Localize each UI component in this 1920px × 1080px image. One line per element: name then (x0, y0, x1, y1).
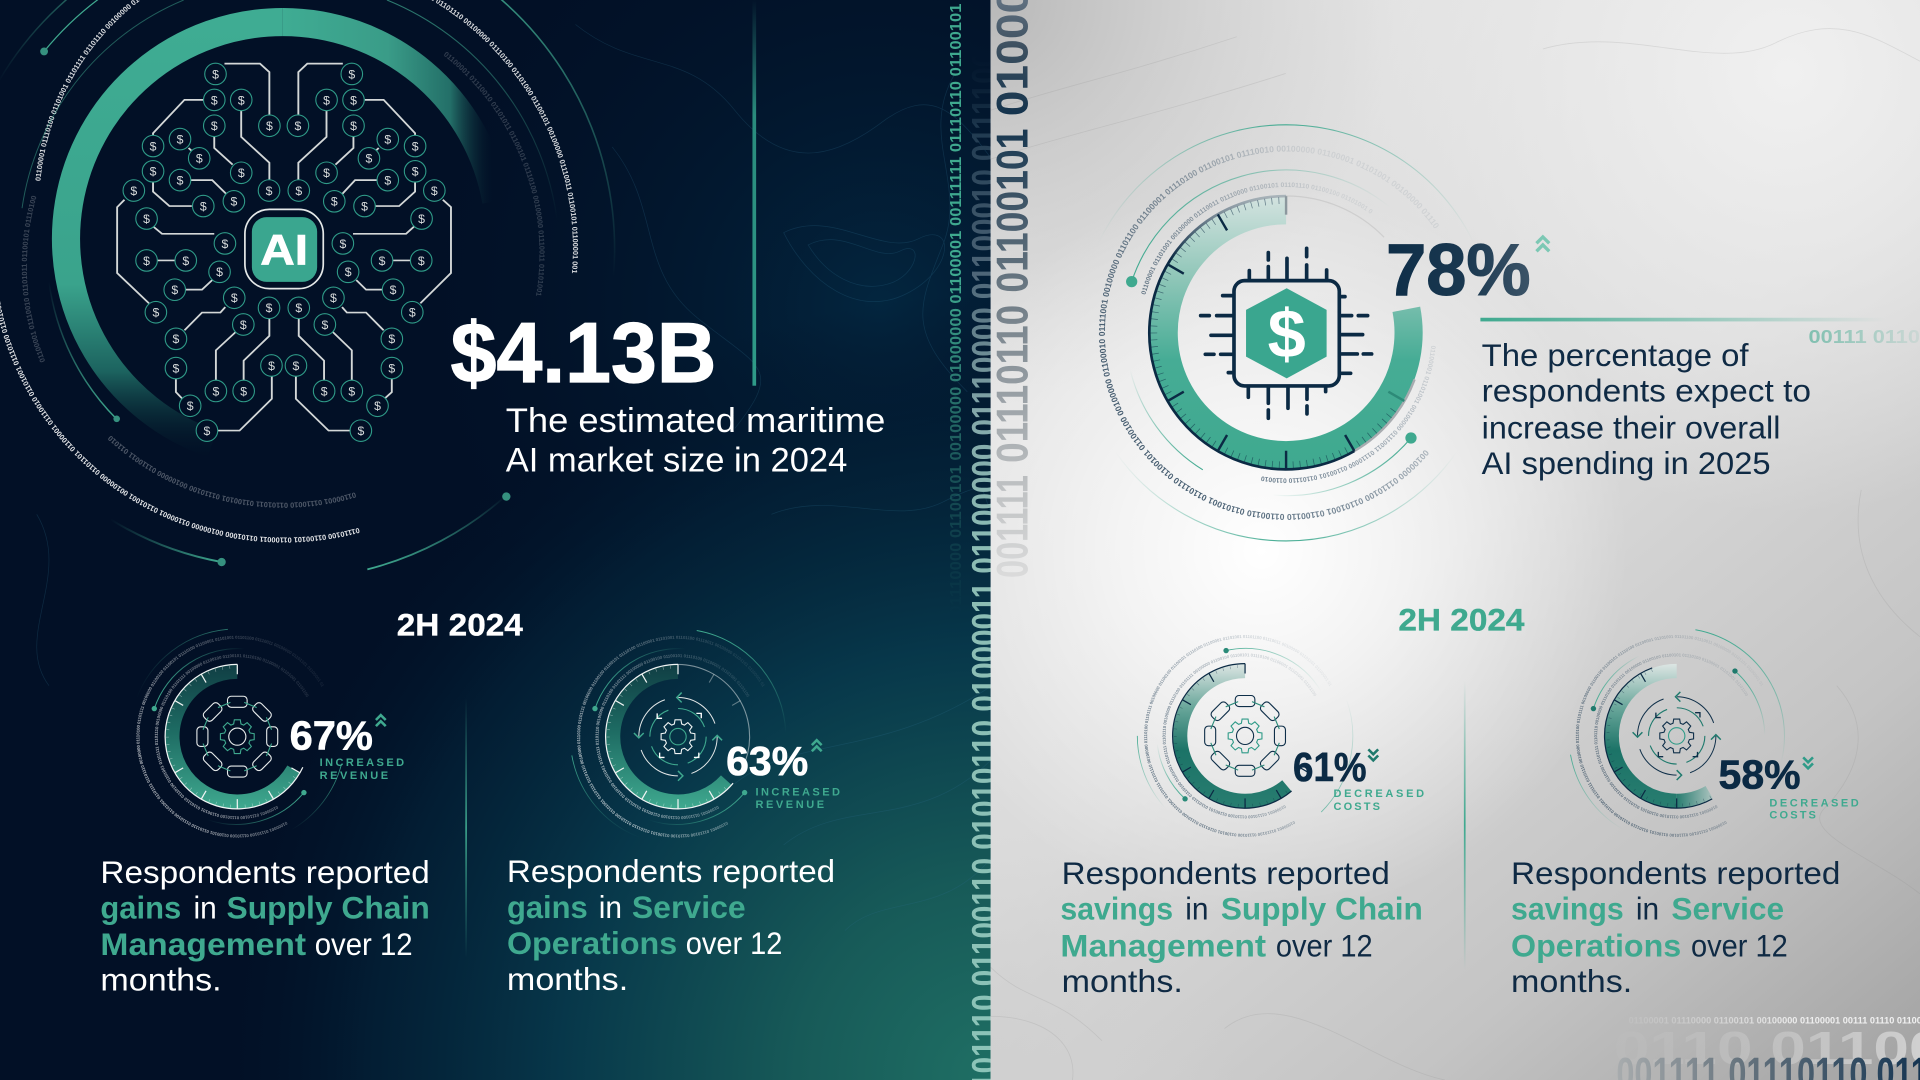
label: 63%: REVENUE (756, 799, 824, 811)
gauge: 78%: 01100001 01101001 00100000 01110011 01110000 01100101 01101110 01100100 01101001 01101110 01100111 01100001 01101001 (1141, 182, 1372, 294)
icon: brain circuit: $ (295, 119, 302, 133)
description: AI spending: AI spending in 2025 (1482, 445, 1771, 481)
text block: supply chain gains: months. (100, 962, 222, 998)
text block: service operations savings: Operations (1511, 927, 1681, 963)
faint binary corner text: 00111 0110 (1809, 326, 1920, 347)
text block: service operations gains: in (599, 889, 622, 925)
label: 63%: 63% (726, 738, 808, 784)
text block: service operations savings: savings (1511, 891, 1624, 927)
icon: brain circuit: $ (388, 332, 395, 346)
panel: maritime AI market size (0, 0, 885, 570)
label: 61% (1293, 744, 1424, 813)
gauge: 63% increased revenue: 01000001 01110100 01110100 01100101 01101110 01110100 01101001 01101111 01101110 00100000 01110100 01101111 00100000 01100100 01100101 01110100 01100001 01101001 01101100 (595, 654, 750, 820)
stat: $4.13B: $4.13B (451, 305, 716, 401)
icon: brain circuit: $ (171, 283, 178, 297)
heading: right 2H 2024: 2H 2024 (1398, 602, 1525, 638)
icon: brain circuit: $ (152, 306, 159, 320)
text block: service operations savings: in (1636, 891, 1659, 927)
gauge: 78%: 01100001 01101001 00100000 01110011 01110000 01100101 01101110 01100100 01101001 01101110 01100111 (1261, 346, 1436, 484)
icon: brain circuit: $ (240, 318, 247, 332)
icon: brain circuit: $ (231, 291, 238, 305)
icon: brain circuit: $ (143, 212, 150, 226)
icon: brain circuit: $ (350, 119, 357, 133)
icon: brain circuit: $ (173, 361, 180, 375)
icon: brain circuit: $ (345, 265, 352, 279)
description: market size: The estimated maritime (506, 402, 885, 440)
description: AI spending: increase their overall (1482, 409, 1780, 445)
icon: dollar chip (1201, 248, 1372, 418)
left panel background (0, 0, 992, 1080)
icon: brain circuit: $ (196, 152, 203, 166)
text block: supply chain gains: over 12 (315, 926, 413, 962)
text block: supply chain savings: Management (1060, 927, 1267, 963)
icon: brain circuit: $ (143, 254, 150, 268)
label: 67%: INCREASED (320, 757, 404, 769)
icon: dollar chip: $ (1268, 296, 1306, 373)
label: 61%: COSTS (1333, 801, 1380, 813)
icon: brain circuit: $ (200, 199, 207, 213)
icon: brain circuit: $ (177, 133, 184, 147)
divider line (1480, 318, 1886, 321)
icon: brain circuit: $ (212, 67, 219, 81)
gauge: 61% decreased costs: 01000001 01110100 01110100 01100101 01101110 01110100 01101001 01101111 01101110 00100000 01110100 01101111 00100000 01100100 01100101 01110100 01100001 01101001 01101100 01110011 00100000 01101101 01100001 01110010 (1144, 635, 1332, 837)
icon: brain circuit: $ (187, 399, 194, 413)
text block: supply chain savings: Respondents reported (1062, 855, 1390, 891)
icon: brain circuit: $ (211, 93, 218, 107)
heading: left 2H 2024: 2H 2024 (397, 607, 523, 643)
icon: brain circuit: $ (238, 166, 245, 180)
icon: brain circuit: $ (222, 237, 229, 251)
gauge: 67% increased revenue: 01000001 01110100 01110100 01100101 01101110 01110100 01101001 01101111 01101110 00100000 01110100 01101111 00100000 01100100 01100101 01110100 01100001 01101001 01101100 (154, 654, 308, 820)
icon: brain circuit: AI (260, 226, 308, 274)
icon: brain circuit: $ (216, 265, 223, 279)
icon: brain circuit: $ (379, 254, 386, 268)
text block: supply chain savings: Supply Chain (1221, 891, 1423, 927)
text block: service operations savings: Respondents reported (1511, 855, 1840, 891)
icon: brain circuit: $ (339, 237, 346, 251)
decorative binary column: right of divider (988, 0, 1037, 578)
stat: 78%: 78% (1386, 228, 1531, 311)
text block: service operations gains: over 12 (686, 925, 782, 961)
icon: brain circuit: $ (412, 165, 419, 179)
text block: service operations gains: Operations (507, 925, 677, 961)
icon: up chevrons (1536, 237, 1549, 251)
icon: brain circuit: $ (348, 67, 355, 81)
icon: brain circuit: $ (266, 119, 273, 133)
text block: service operations savings: months. (1511, 963, 1632, 999)
decorative binary column: right of divider: 001111 (988, 475, 1037, 578)
icon: brain circuit: $ (150, 139, 157, 153)
label: 58%: COSTS (1769, 810, 1816, 822)
icon: brain circuit: $ (323, 166, 330, 180)
text block: supply chain savings: months. (1062, 963, 1183, 999)
icon: brain circuit: $ (173, 332, 180, 346)
icon: brain circuit: $ (212, 384, 219, 398)
decorative binary column: right of divider: 01110110 (988, 305, 1037, 463)
icon: brain circuit: $ (350, 93, 357, 107)
icon: brain circuit: $ (240, 384, 247, 398)
gauge: 63% increased revenue: 01000001 01110100 01110100 01100101 01101110 01110100 01101001 01101111 01101110 00100000 01110100 01101111 00100000 01100100 01100101 01110100 01100001 01101001 01101100 01110011 00100000 01101101 01100001 01110010 (577, 636, 764, 838)
icon: brain circuit: $ (238, 93, 245, 107)
label: 58%: 58% (1719, 752, 1801, 798)
divider: left (465, 698, 467, 958)
icon: brain circuit: $ (323, 93, 330, 107)
text block: supply chain gains (100, 854, 430, 998)
circular binary rings and accent arcs (0, 0, 616, 570)
text block: service operations savings: Service (1671, 891, 1784, 927)
label: 63% (726, 738, 840, 811)
label: 63%: INCREASED (756, 786, 840, 798)
label: 58% (1719, 752, 1859, 822)
circular binary rings and accent arcs: 01100001 01110010 01101011 01100101 01110100 00100000 01110011 01101001 01111010 01100101 00100000 01101001 01101110 00100000 01101101 01100001 (108, 436, 356, 508)
right panel background (991, 0, 1920, 1080)
icon: brain circuit: $ (330, 291, 337, 305)
icon: brain circuit: $ (177, 174, 184, 188)
icon: brain circuit: $ (130, 184, 137, 198)
icon: brain circuit: $ (295, 184, 302, 198)
text block: supply chain gains: Management (100, 926, 307, 962)
label: 58%: DECREASED (1769, 797, 1859, 809)
icon: brain circuit: $ (409, 306, 416, 320)
text block: service operations savings (1511, 855, 1840, 999)
icon: brain circuit: $ (418, 212, 425, 226)
text block: supply chain savings (1060, 855, 1423, 999)
panel: AI spending 78% (1098, 124, 1920, 542)
gauge: 58% decreased costs: 01000001 01110100 01110100 01100101 01101110 01110100 01101001 01101111 01101110 00100000 01110100 01101111 00100000 01100100 01100101 01110100 01100001 01101001 01101100 (1594, 653, 1748, 818)
text block: supply chain savings: over 12 (1276, 927, 1373, 963)
decorative binary column: small teal: 01110000 01100101 00100000 01000000 01100001 00111111 01110110 01100101 01 (948, 0, 965, 615)
icon: brain circuit: $ (388, 361, 395, 375)
label: 67% (290, 712, 404, 782)
text block: service operations savings: over 12 (1691, 927, 1788, 963)
label: 67%: 67% (290, 712, 373, 758)
text block: supply chain gains: Respondents reported (100, 854, 430, 890)
text block: service operations gains: Service (632, 889, 746, 925)
text block: supply chain gains: Supply Chain (227, 889, 430, 925)
icon: brain circuit: $ (348, 384, 355, 398)
icon: brain circuit: $ (357, 424, 364, 438)
icon: brain circuit: $ (230, 195, 237, 209)
divider: right (1464, 681, 1466, 970)
description: AI spending: respondents expect to (1482, 373, 1811, 409)
label: 61%: 61% (1293, 744, 1367, 790)
decorative binary corner: 0110 01100 (1614, 1022, 1920, 1074)
label: 67%: REVENUE (320, 770, 388, 782)
decorative binary column: right of divider: 01100101 (988, 129, 1037, 293)
gauge: 67% increased revenue: 01000001 01110100 01110100 01100101 01101110 01110100 01101001 01101111 01101110 00100000 01110100 01101111 00100000 01100100 01100101 01110100 01100001 01101001 01101100 01110011 00100000 01101101 01100001 01110010 (136, 636, 324, 838)
description: AI spending: The percentage of (1482, 337, 1749, 373)
text block: supply chain gains: gains (100, 889, 181, 925)
gauge: 78%: 00100000 01110100 01101001 01100110 01100110 01101001 01101110 01100101 01100100 00100000 01100010 01111001 00100000 01101100 01100001 01110100 01100101 01110010 00100000 01100001 01101001 00100000 01110011 01110000 01100101 01101110 01100100 01101001 01101110 01100111 00100000 01101001 01101110 00100000 01110100 01101000 01100101 00100000 01101100 (1098, 146, 1438, 520)
icon: brain circuit: $ (266, 301, 273, 315)
icon: brain circuit: $ (374, 399, 381, 413)
gauge: 58% decreased costs: 01000001 01110100 01110100 01100101 01101110 01110100 01101001 01101111 01101110 00100000 01110100 01101111 00100000 01100100 01100101 01110100 01100001 01101001 01101100 01110011 00100000 01101101 01100001 01110010 (1576, 635, 1763, 837)
description: AI spending (1482, 337, 1811, 481)
text block: supply chain savings: in (1185, 891, 1209, 927)
gauge: 61% decreased costs: 01000001 01110100 01110100 01100101 01101110 01110100 01101001 01101111 01101110 00100000 01110100 01101111 00100000 01100100 01100101 01110100 01100001 01101001 01101100 (1162, 653, 1316, 818)
icon: brain circuit: $ (268, 359, 275, 373)
decorative binary corner (1614, 1016, 1920, 1080)
description: market size: AI market size in 2024 (506, 441, 847, 479)
text block: service operations gains (507, 853, 835, 997)
icon: brain circuit: $ (331, 195, 338, 209)
big teal progress ring (66, 22, 496, 444)
icon: brain circuit: $ (431, 184, 438, 198)
icon: brain circuit: $ (321, 384, 328, 398)
icon: brain circuit: $ (418, 254, 425, 268)
icon: brain circuit: $ (390, 283, 397, 297)
icon: brain circuit: $ (366, 152, 373, 166)
icon: brain circuit: $ (384, 174, 391, 188)
vertical accent line (752, 0, 756, 386)
icon: brain circuit: $ (321, 318, 328, 332)
text block: service operations gains: months. (507, 961, 628, 997)
text block: supply chain savings: savings (1060, 891, 1173, 927)
icon: brain circuit: $ (384, 133, 391, 147)
icon: brain circuit: $ (150, 165, 157, 179)
icon: brain circuit (117, 63, 451, 441)
icon: brain circuit: $ (211, 119, 218, 133)
label: 61%: DECREASED (1333, 788, 1424, 800)
description: market size (506, 402, 885, 479)
text block: service operations gains: Respondents reported (507, 853, 835, 889)
text block: service operations gains: gains (507, 889, 588, 925)
circular binary rings and accent arcs: 01100001 01110010 01101011 01100101 01110100 00100000 01110011 01101001 01111010 01100101 00100000 01101001 (444, 52, 545, 296)
icon: brain circuit: $ (293, 359, 300, 373)
text block: supply chain gains: in (193, 889, 217, 925)
icon: brain circuit: $ (182, 254, 189, 268)
icon: brain circuit: $ (295, 301, 302, 315)
icon: brain circuit: $ (412, 139, 419, 153)
icon: brain circuit: $ (204, 424, 211, 438)
icon: brain circuit: $ (361, 199, 368, 213)
icon: brain circuit: $ (266, 184, 273, 198)
